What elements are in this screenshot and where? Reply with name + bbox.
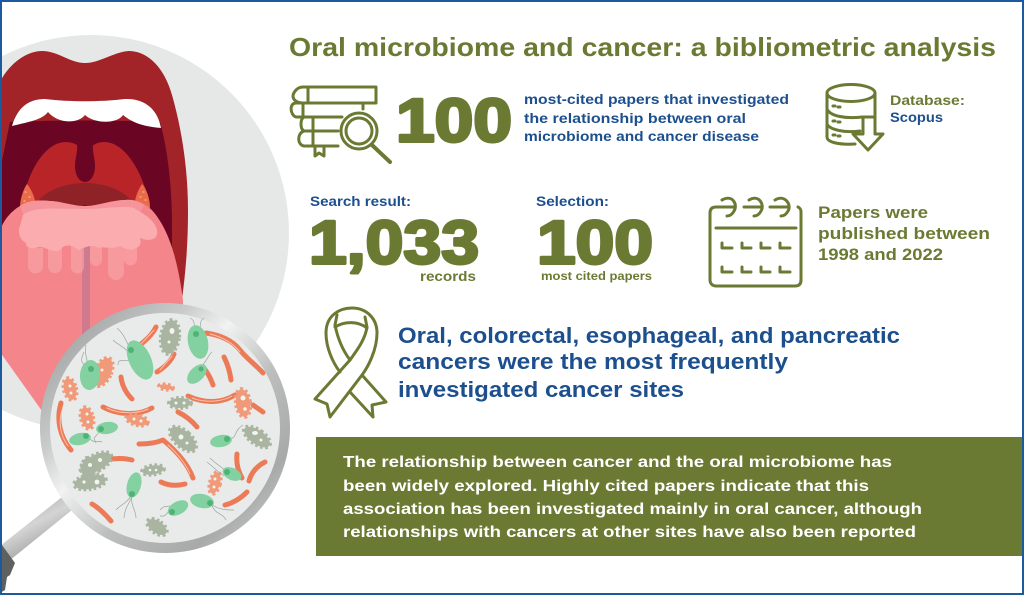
stat: search result	[309, 193, 479, 284]
conclusion panel: association has been investigated mainly in oral cancer, although	[343, 501, 922, 518]
lens ring	[40, 303, 290, 553]
publication dates text: 1998 and 2022	[818, 245, 943, 264]
key finding: cancer sites: cancers were the most frequently	[398, 349, 789, 374]
key finding: cancer sites: investigated cancer sites	[398, 377, 684, 402]
tongue top band	[20, 200, 144, 216]
background circle	[0, 35, 289, 431]
key finding: cancer sites: Oral, colorectal, esophageal, and pancreatic	[398, 323, 900, 348]
stat: selection: most cited papers	[541, 269, 652, 283]
orange spiky bacteria	[61, 355, 252, 495]
stat: selection: 100	[537, 208, 653, 276]
upper teeth	[12, 99, 161, 128]
lips	[0, 51, 188, 300]
stat: search result: Search result:	[310, 193, 411, 209]
icon: awareness ribbon	[315, 308, 386, 417]
description: most-cited papers: microbiome and cancer disease	[524, 129, 760, 144]
orange rod bacteria	[59, 327, 265, 521]
mouth cavity	[0, 120, 172, 250]
stat: 100 papers: 100	[396, 86, 512, 154]
illustration: open mouth	[0, 51, 188, 411]
uvula	[75, 142, 95, 182]
publication dates text: published between	[818, 224, 990, 243]
tongue centre line	[82, 238, 90, 335]
tongue	[0, 200, 183, 411]
handle	[0, 497, 72, 593]
conclusion panel	[316, 437, 1024, 556]
tonsils	[20, 184, 150, 208]
publication dates text: Papers were	[818, 203, 928, 222]
database label	[890, 92, 965, 125]
title: Oral microbiome and cancer: a bibliometric analysis	[289, 32, 996, 62]
stat: selection	[536, 193, 653, 283]
grey spiky bacteria	[73, 319, 273, 538]
icon: calendar	[710, 198, 801, 286]
conclusion panel: relationships with cancers at other sites have also been reported	[343, 524, 916, 541]
stat: search result: 1,033	[309, 208, 479, 276]
throat	[35, 183, 135, 205]
key finding: cancer sites	[398, 323, 900, 402]
stat: selection: Selection:	[536, 193, 609, 209]
database label: Scopus	[890, 109, 943, 125]
publication dates text	[818, 203, 990, 264]
description: most-cited papers	[524, 92, 789, 144]
tongue papillae	[19, 207, 157, 280]
description: most-cited papers: most-cited papers that investigated	[524, 92, 789, 107]
icon: database download	[827, 84, 883, 150]
conclusion panel: been widely explored. Highly cited papers indicate that this	[343, 478, 869, 495]
stat: search result: records	[420, 269, 476, 284]
palate	[22, 142, 150, 205]
conclusion panel: The relationship between cancer and the oral microbiome has	[343, 454, 892, 471]
magnifying glass	[0, 303, 290, 593]
icon: books with magnifier	[291, 87, 390, 162]
lens interior	[50, 313, 280, 543]
green flagellate bacteria	[68, 318, 244, 520]
database label: Database:	[890, 92, 965, 108]
description: most-cited papers: the relationship between oral	[524, 111, 746, 126]
